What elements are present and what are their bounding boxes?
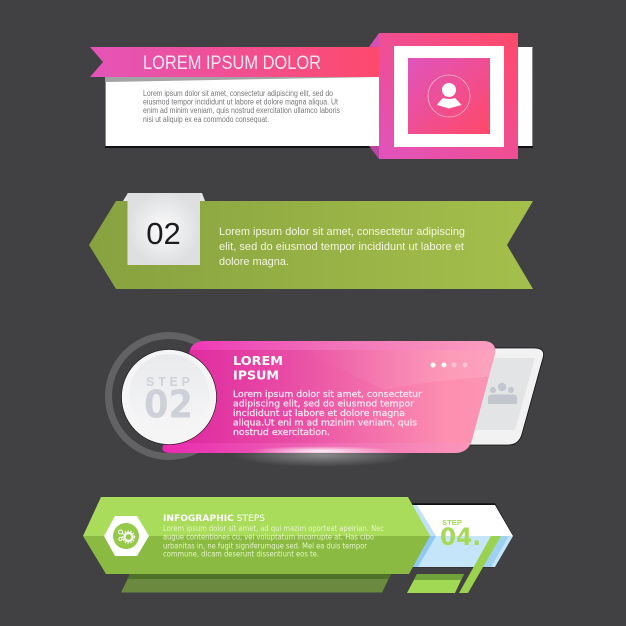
- green arrow shape: [89, 201, 533, 289]
- white content card: [105, 47, 533, 148]
- body text: enim ad minim veniam, quis nostrud exercitation ullamco laboris: [143, 106, 340, 115]
- ribbon heading: LOREM IPSUM DOLOR: [143, 52, 321, 74]
- panel: green arrow banner: [89, 193, 533, 289]
- magenta card: [150, 341, 500, 456]
- description text: elit, sed do eiusmod tempor incididunt ut labore et: [219, 241, 464, 253]
- body text: commune, dicam deserunt dissentiunt eos te.: [163, 550, 319, 558]
- description text: dolore magna.: [219, 256, 289, 268]
- panel: profile banner: [90, 33, 533, 159]
- small parallelogram: [407, 574, 464, 593]
- body text: [233, 390, 422, 438]
- panel: step 02 glossy card: [108, 336, 544, 467]
- icon: hexagon with gears: [104, 516, 149, 556]
- floor glow: [232, 443, 412, 467]
- ring: [108, 336, 230, 456]
- panel: infographic steps: [83, 497, 513, 593]
- tab behind number card: [123, 193, 205, 201]
- number card: 02: [146, 216, 181, 251]
- body text: Lorem ipsum dolor sit amet, consectetur adipiscing elit, sed do: [143, 89, 334, 98]
- pagination dots: [430, 362, 468, 368]
- step badge: [122, 350, 216, 444]
- body text: [163, 524, 384, 558]
- body text: urbanitas in, ne fugit signiferumque sed. Mel ea duis tempor: [163, 542, 368, 550]
- folded corners: [369, 33, 379, 47]
- step 04 tab: 04.: [440, 523, 481, 551]
- icon: group of people: [488, 383, 517, 404]
- body text: Lorem ipsum dolor sit amet, consectetur: [233, 390, 422, 400]
- body text: nostrud exercitation.: [233, 428, 330, 438]
- body text: incididunt ut labore et dolore magna: [233, 409, 405, 419]
- green slash: [459, 536, 501, 593]
- heading: [233, 354, 283, 382]
- number card: [128, 193, 200, 265]
- back tab: [440, 348, 544, 445]
- icon: person: [428, 75, 470, 117]
- body text: nisi ut aliquip ex ea commodo consequat.: [143, 115, 269, 124]
- green hexagonal body: [83, 497, 430, 574]
- body text: [143, 89, 340, 124]
- description text: [219, 226, 465, 268]
- step badge: 02: [144, 382, 193, 426]
- body text: adipiscing elit, sed do eiusmod tempor: [233, 400, 415, 410]
- step 04 tab: [410, 503, 513, 567]
- body text: Lorem ipsum dolor sit amet, ad qui mazim oporteat apeirian. Nec: [163, 524, 384, 533]
- heading: LOREM: [233, 354, 283, 368]
- under shadow band: [121, 574, 391, 592]
- ribbon heading: [90, 47, 380, 77]
- pink picture frame: [379, 33, 518, 159]
- body text: augue contentiones cu, vel voluptatum incorrupte at. Has cibo: [163, 532, 374, 542]
- heading: IPSUM: [233, 368, 279, 382]
- step 04 tab: STEP: [442, 518, 462, 527]
- description text: Lorem ipsum dolor sit amet, consectetur adipiscing: [219, 226, 465, 238]
- body text: eiusmod tempor incididunt ut labore et dolore magna aliqua. Ut: [143, 98, 339, 106]
- step badge: STEP: [146, 375, 190, 389]
- body text: aliqua.Ut eni m ad mzinim veniam, quis: [233, 418, 418, 428]
- heading: INFOGRAPHIC STEPS: [163, 514, 265, 524]
